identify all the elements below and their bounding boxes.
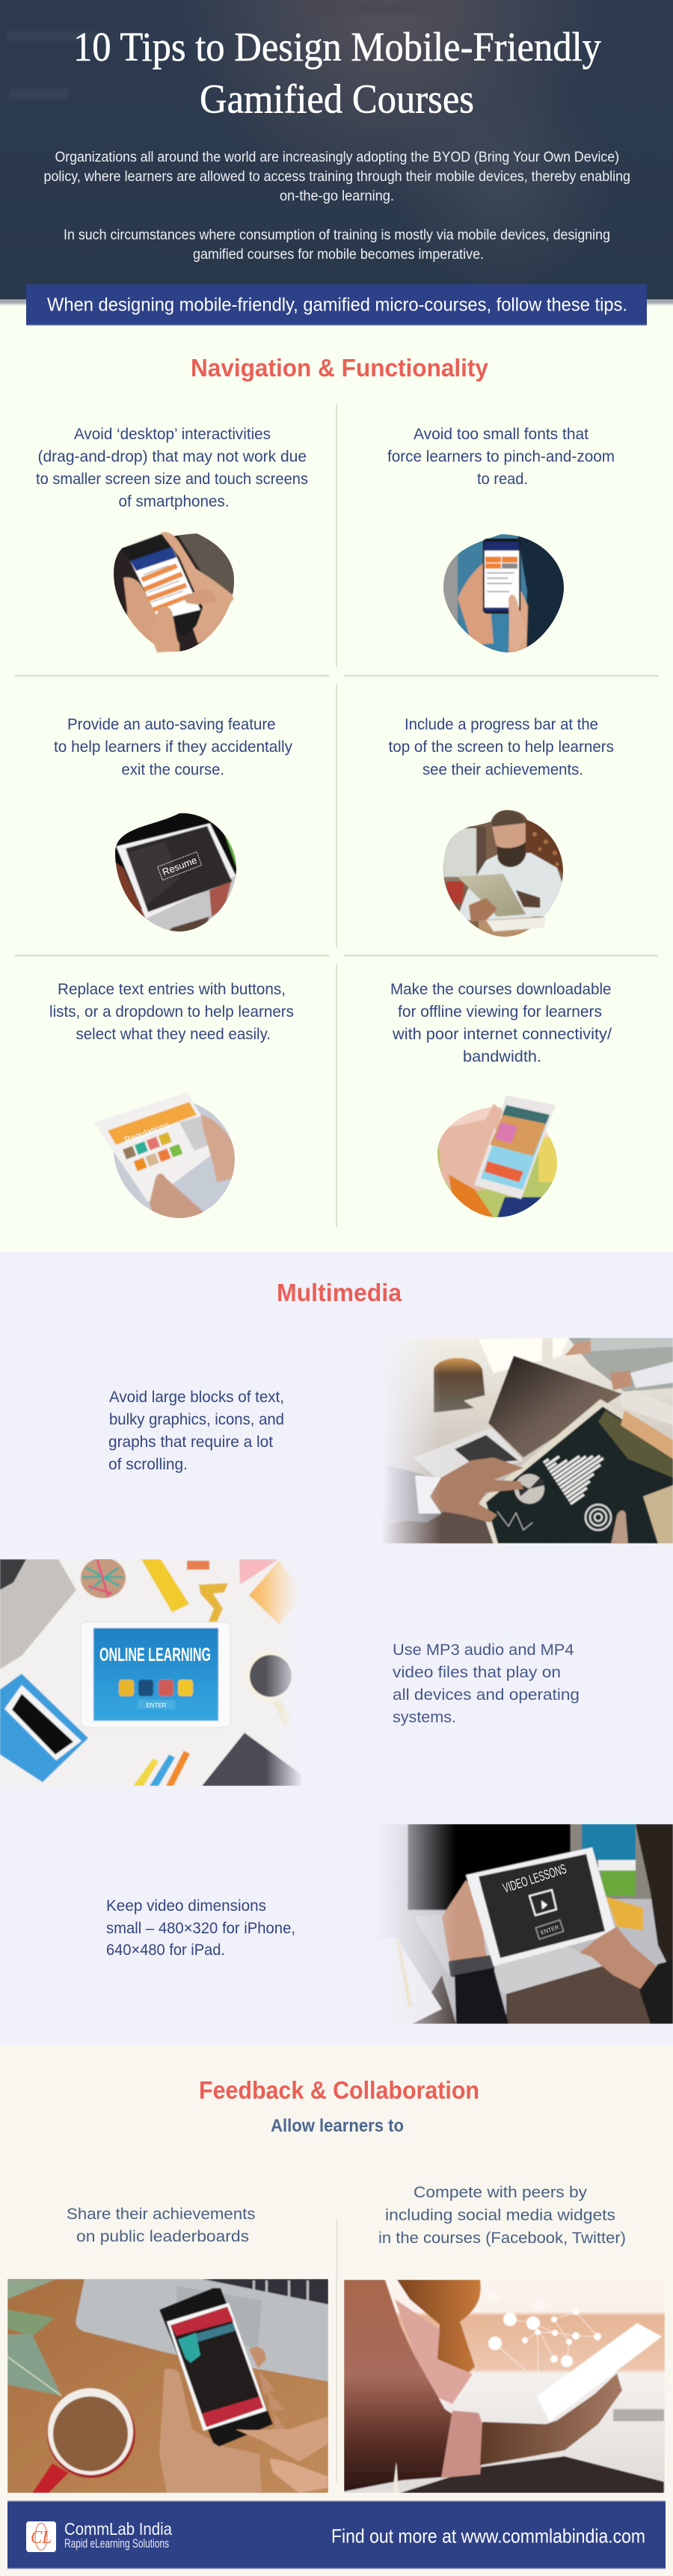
photo: person with glowing tablet and social network icons — [344, 2280, 665, 2493]
tip 2 text: Avoid too small fonts that — [414, 425, 589, 443]
icon: phone with small fonts over jeans — [443, 534, 564, 652]
intro paragraph: Organizations all around the world are increasingly adopting the BYOD (Bring Your Own Device) — [55, 149, 619, 165]
intro paragraph: In such circumstances where consumption of training is mostly via mobile devices, designing — [64, 227, 610, 243]
tip 4 text: Include a progress bar at the — [405, 715, 598, 733]
photo: online learning tablet on desk — [0, 1558, 303, 1786]
tip 2 text: force learners to pinch-and-zoom — [387, 447, 615, 465]
heading: feedback and collaboration: Feedback & Collaboration — [199, 2076, 479, 2104]
tip 3 text — [54, 715, 292, 778]
icon: bearded man using tablet — [441, 808, 568, 939]
feedback tip 1 text: on public leaderboards — [76, 2227, 249, 2245]
feedback tip 1 text: Share their achievements — [67, 2205, 256, 2223]
intro paragraph: on-the-go learning. — [280, 188, 394, 204]
photo: online learning tablet on desk: ENTER — [146, 1702, 167, 1709]
multimedia tip 2 text: Use MP3 audio and MP4 — [393, 1641, 574, 1659]
tip 1 text: (drag-and-drop) that may not work due — [37, 447, 307, 465]
tip 5 text: Replace text entries with buttons, — [58, 980, 286, 998]
photo: hands holding tablet with video lessons — [375, 1824, 673, 2024]
panel: header background — [0, 0, 673, 305]
panel: navigation section background — [0, 302, 673, 1252]
tip 1 text: of smartphones. — [118, 492, 229, 510]
tip 1 text — [36, 425, 308, 510]
title: 10 Tips to Design Mobile-Friendly — [73, 24, 601, 70]
panel: multimedia section background — [0, 1252, 673, 2046]
photo: online learning tablet on desk: ONLINE LEARNING — [99, 1645, 211, 1665]
tip 5 text: lists, or a dropdown to help learners — [49, 1003, 294, 1021]
multimedia tip 1 text — [108, 1388, 284, 1473]
multimedia tip 3 text: small – 480×320 for iPhone, — [106, 1919, 295, 1937]
tip 3 text: Provide an auto-saving feature — [67, 715, 275, 733]
tip 6 text: Make the courses downloadable — [390, 980, 612, 998]
icon: tablet with resume button — [112, 812, 239, 935]
photo: business person with data tablet and laptop — [381, 1338, 673, 1544]
multimedia tip 2 text: systems. — [393, 1708, 456, 1726]
tip 1 text: Avoid ‘desktop’ interactivities — [74, 425, 271, 443]
photo: hands holding tablet with video lessons: VIDEO LESSONS — [501, 1861, 568, 1896]
tip 5 text — [49, 980, 294, 1043]
feedback tip 2 text: including social media widgets — [385, 2206, 615, 2224]
multimedia tip 1 text: bulky graphics, icons, and — [109, 1410, 284, 1428]
tip 6 text — [390, 980, 612, 1065]
multimedia tip 1 text: graphs that require a lot — [108, 1433, 273, 1451]
tip 2 text — [387, 425, 615, 488]
tip 6 text: for offline viewing for learners — [398, 1003, 602, 1021]
brand name: Rapid eLearning Solutions — [64, 2537, 169, 2551]
tip 4 text — [389, 715, 614, 778]
tip 1 text: to smaller screen size and touch screens — [36, 470, 308, 488]
feedback tip 2 text — [378, 2183, 626, 2247]
multimedia tip 3 text: 640×480 for iPad. — [106, 1941, 225, 1959]
tip 6 text: bandwidth. — [463, 1047, 541, 1065]
multimedia tip 2 text: all devices and operating — [393, 1686, 580, 1704]
icon: tablet with resume button: Resume — [161, 854, 198, 878]
heading: multimedia: Multimedia — [277, 1279, 402, 1306]
icon: tablet with regulations buttons: Regulations — [123, 1119, 171, 1145]
tip 3 text: exit the course. — [121, 760, 224, 778]
tip 4 text: top of the screen to help learners — [389, 738, 614, 756]
subheading: allow learners to: Allow learners to — [271, 2116, 404, 2136]
banner: follow these tips: When designing mobile-friendly, gamified micro-courses, follow these tips. — [47, 295, 627, 316]
title: Gamified Courses — [200, 76, 474, 121]
multimedia tip 2 text — [393, 1641, 580, 1726]
feedback tip 2 text: Compete with peers by — [414, 2183, 587, 2201]
title — [73, 24, 601, 121]
tip 3 text: to help learners if they accidentally — [54, 738, 292, 756]
panel: feedback section background — [0, 2046, 673, 2576]
multimedia tip 3 text: Keep video dimensions — [106, 1897, 266, 1915]
tip 2 text: to read. — [477, 470, 528, 488]
logo — [26, 2521, 56, 2552]
multimedia tip 3 text — [106, 1897, 295, 1959]
footer bar — [7, 2500, 666, 2569]
icon: hands holding phone with course screen — [114, 531, 235, 653]
feedback tip 1 text — [67, 2205, 256, 2245]
tip 5 text: select what they need easily. — [76, 1025, 271, 1043]
heading: navigation and functionality: Navigation & Functionality — [191, 354, 489, 382]
intro paragraph — [43, 149, 630, 263]
brand name: CommLab India — [64, 2519, 172, 2539]
multimedia tip 1 text: of scrolling. — [108, 1455, 188, 1473]
logo: CL — [31, 2528, 52, 2548]
icon: tablet with regulations buttons — [93, 1092, 238, 1220]
icon: phone with download course — [435, 1095, 561, 1220]
brand name — [64, 2519, 172, 2551]
multimedia tip 2 text: video files that play on — [393, 1663, 561, 1681]
intro paragraph: policy, where learners are allowed to access training through their mobile devices, thereby enabling — [43, 168, 630, 185]
intro paragraph: gamified courses for mobile becomes imperative. — [193, 246, 484, 263]
banner: follow these tips — [26, 284, 647, 325]
feedback tip 2 text: in the courses (Facebook, Twitter) — [378, 2229, 626, 2247]
photo: hands holding tablet with video lessons: ENTER — [540, 1924, 560, 1936]
tip 4 text: see their achievements. — [422, 760, 583, 778]
multimedia tip 1 text: Avoid large blocks of text, — [109, 1388, 284, 1406]
photo: phone with leaderboard and coffee — [7, 2279, 328, 2493]
tip 6 text: with poor internet connectivity/ — [392, 1025, 612, 1043]
